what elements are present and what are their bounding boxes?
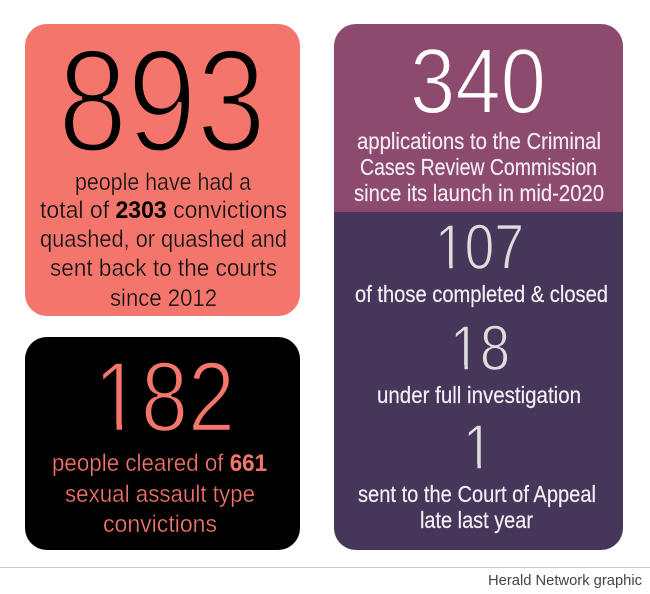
big number 340: 340 xyxy=(410,29,546,133)
description: 893: since 2012 xyxy=(110,285,217,312)
description: 340: Cases Review Commission xyxy=(360,154,597,180)
description: 182: convictions xyxy=(103,511,217,538)
big number 893: 893 xyxy=(58,19,266,182)
label: sent to Court of Appeal xyxy=(358,481,596,533)
description: 340: applications to the Criminal xyxy=(357,128,601,154)
description: 340 xyxy=(354,128,604,206)
panel: 340 applications xyxy=(334,24,623,212)
description: 182: people cleared of 661 xyxy=(52,450,267,477)
description: 893: people have had a xyxy=(75,169,252,196)
panel: application outcomes xyxy=(334,211,623,550)
description: 893 xyxy=(40,169,287,312)
description: 893: total of 2303 convictions xyxy=(40,197,287,224)
description: 340: since its launch in mid-2020 xyxy=(354,180,604,206)
description: 182: sexual assault type xyxy=(65,481,255,508)
label: sent to Court of Appeal: late last year xyxy=(420,507,533,533)
panel: 893 convictions quashed xyxy=(25,19,300,316)
number 107: 107 xyxy=(435,211,524,283)
label: under investigation: under full investigation xyxy=(377,382,581,408)
number 1: 1 xyxy=(463,411,493,483)
description: 893: quashed, or quashed and xyxy=(40,226,287,253)
panel: 182 sexual assault convictions xyxy=(25,337,300,550)
big number 182: 182 xyxy=(94,341,235,452)
description: 893: sent back to the courts xyxy=(50,255,277,282)
credit line: Herald Network graphic xyxy=(488,572,642,589)
number 18: 18 xyxy=(450,312,510,384)
description: 182 xyxy=(52,450,267,538)
label: sent to Court of Appeal: sent to the Court of Appeal xyxy=(358,481,596,507)
label: completed: of those completed & closed xyxy=(355,281,608,307)
